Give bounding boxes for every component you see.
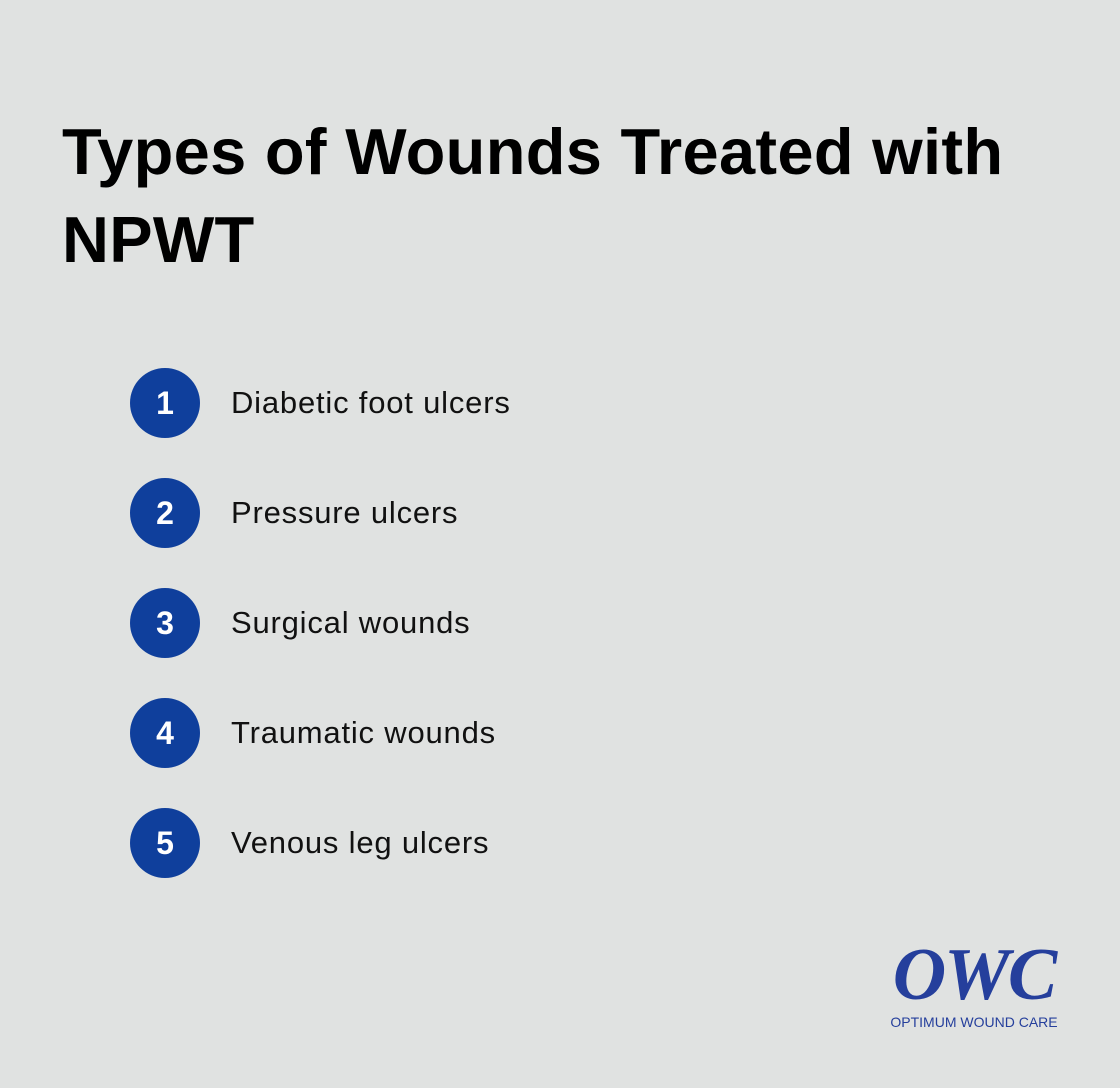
item 4	[130, 698, 496, 768]
item 2	[130, 478, 458, 548]
item 1	[130, 368, 511, 438]
item 4: 4	[156, 715, 174, 751]
item 2: 2	[156, 495, 174, 531]
item 3: 3	[156, 605, 174, 641]
item 4: Traumatic wounds	[231, 715, 496, 750]
item 2: Pressure ulcers	[231, 495, 458, 530]
logo: OWC	[893, 934, 1055, 1016]
item 1: Diabetic foot ulcers	[231, 385, 511, 420]
title: Types of Wounds Treated with NPWT	[62, 115, 1003, 276]
item 3	[130, 588, 470, 658]
item 3: Surgical wounds	[231, 605, 470, 640]
item 1: 1	[156, 385, 174, 421]
item 5	[130, 808, 489, 878]
logo: OPTIMUM WOUND CARE	[890, 1014, 1058, 1030]
item 5: Venous leg ulcers	[231, 825, 489, 860]
item 5: 5	[156, 825, 174, 861]
